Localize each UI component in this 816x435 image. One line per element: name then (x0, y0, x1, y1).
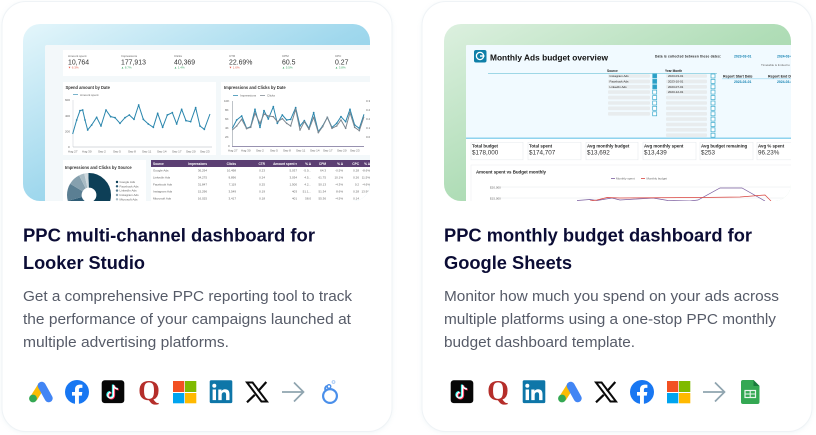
icon: Microsoft (173, 381, 196, 403)
card: Google Sheets budget dashboard (422, 2, 812, 432)
data table by source: Facebook Ads (153, 182, 173, 186)
icon: Microsoft (667, 381, 690, 403)
line chart: impressions and clicks by date: 8K (225, 108, 229, 112)
data table by source: 0.28 (353, 190, 359, 194)
data table by source: 13.9% (361, 190, 370, 194)
KPI boxes: $178,000 (472, 150, 499, 156)
line chart: spend by date: 200 (65, 130, 70, 134)
card 1 description: the performance of your campaigns launched at (23, 312, 351, 328)
KPI boxes: $13,439 (644, 150, 667, 156)
line chart: impressions and clicks by date: Sep 23 (350, 148, 360, 152)
KPI boxes: Avg monthly budget (587, 144, 630, 149)
data table by source: 0.18 (259, 196, 265, 200)
icon: Google Sheets (741, 380, 760, 404)
line chart: amount spent vs budget monthly: Amount spent vs Budget monthly (476, 170, 547, 174)
line chart: impressions and clicks by date: 2K (225, 135, 229, 139)
KPI strip: ▲ 5.5% (282, 66, 293, 70)
line chart: spend by date: Sep 17 (172, 150, 182, 154)
KPI strip: ▲ 1.4% (174, 66, 185, 70)
donut chart: impressions and clicks by source: Microsoft Ads (120, 197, 138, 201)
year-month selector: 2023-07-01 (668, 85, 684, 89)
sheet header: Report End Date (768, 74, 796, 78)
data table by source: 3,034 (289, 176, 297, 180)
line chart: impressions and clicks by date: Sep 20 (337, 148, 347, 152)
icon row: data sources to Google Sheets (451, 376, 760, 407)
icon: LinkedIn (523, 380, 545, 403)
data table by source: -8.6% (362, 168, 370, 172)
data table by source: -4.6% (362, 182, 370, 186)
data table by source: 10.1% (334, 176, 343, 180)
KPI strip: ▼ 1.6% (229, 66, 240, 70)
data table by source: 9,896 (228, 176, 236, 180)
line chart: impressions and clicks by date: 0.0 (366, 135, 371, 139)
source selector: Facebook Ads (610, 79, 629, 83)
data table by source: 401 (292, 196, 297, 200)
data table by source: 0.24 (259, 176, 265, 180)
KPI boxes: Total spent (529, 144, 553, 149)
line chart: impressions and clicks by date: 0.1 (366, 126, 371, 130)
KPI strip: 177,913 (121, 60, 146, 66)
card 2 title: Google Sheets (444, 253, 572, 273)
data table by source: % Δ (337, 162, 344, 166)
data table by source: Source (153, 162, 164, 166)
icon: Looker Studio (323, 381, 337, 403)
icon: X (247, 382, 267, 402)
line chart: spend by date: Aug 30 (82, 150, 92, 154)
card 2 title: PPC monthly budget dashboard for (444, 226, 752, 246)
KPI boxes: $253 (701, 150, 716, 156)
icon: TikTok (451, 380, 473, 403)
card: Looker Studio dashboard (2, 2, 392, 432)
data table by source: 64.3 (320, 168, 326, 172)
source selector: Instagram Ads (610, 74, 629, 78)
data table by source: Instagram Ads (153, 190, 173, 194)
KPI strip: Clicks (174, 54, 182, 58)
data table by source: 58.0 (305, 196, 311, 200)
KPI boxes: 96.23% (758, 150, 780, 156)
line chart: impressions and clicks by date: Sep 17 (323, 148, 333, 152)
line chart: amount spent vs budget monthly (470, 164, 791, 201)
icon: Google Ads (558, 386, 578, 402)
KPI strip (63, 50, 373, 76)
year-month selector (665, 69, 715, 137)
data table by source: 0.25 (259, 182, 265, 186)
line chart: impressions and clicks by date: Sep 11 (296, 148, 306, 152)
icon: Facebook (630, 380, 654, 404)
data table by source: CTR (258, 162, 266, 166)
data table by source: 55.36 (318, 196, 326, 200)
icon: X (596, 382, 616, 402)
data table by source: Amount spent ▾ (273, 162, 297, 166)
card 1 description (23, 289, 353, 351)
line chart: spend by date (63, 82, 216, 155)
line chart: impressions and clicks by date: Sep 2 (256, 148, 264, 152)
card 1 description: Get a comprehensive PPC reporting tool to track (23, 289, 353, 305)
arrow (703, 382, 724, 402)
data table by source: 31,847 (198, 182, 207, 186)
sheet header: Report Start Date (723, 74, 753, 78)
line chart: impressions and clicks by date: Impressions and Clicks by Date (224, 85, 286, 90)
year-month selector: 2023-10-01 (668, 79, 684, 83)
KPI strip: 10,764 (68, 60, 89, 66)
data table by source: 0.19 (259, 190, 265, 194)
icon: Quora: Q (487, 376, 509, 407)
KPI strip: ▲ 3.8% (335, 66, 346, 70)
line chart: impressions and clicks by date: Aug 27 (228, 148, 238, 152)
data table by source (151, 160, 370, 201)
line chart: impressions and clicks by date: Aug 30 (241, 148, 251, 152)
data table by source: 0.2 (355, 182, 359, 186)
year-month selector: 2023-03-01 (668, 74, 684, 78)
donut chart: impressions and clicks by source: Facebook Ads (120, 184, 139, 188)
data table by source: 0.23 (259, 168, 265, 172)
data table by source: 5,037 (289, 168, 297, 172)
icon: Facebook (65, 380, 89, 404)
line chart: spend by date: Sep 5 (113, 150, 121, 154)
line chart: impressions and clicks by date: 0 (228, 144, 230, 148)
sheet header: Monthly Ads budget overview (490, 52, 608, 62)
data table by source: 34,275 (198, 176, 207, 180)
donut chart: impressions and clicks by source (63, 160, 146, 201)
line chart: spend by date: 600 (65, 98, 70, 102)
KPI strip: CPM (282, 54, 289, 58)
data table by source: Clicks (227, 162, 236, 166)
KPI strip: Amount spent (68, 54, 87, 58)
line chart: impressions and clicks by date: Impressions (240, 94, 257, 98)
data table by source: 7,119 (229, 182, 236, 186)
KPI boxes: Avg monthly spent (644, 144, 684, 149)
data table by source: -0.5% (335, 168, 343, 172)
line chart: spend by date: Sep 20 (186, 150, 196, 154)
data table by source: CPM (319, 162, 326, 166)
data table by source: 10,498 (227, 168, 236, 172)
KPI strip: 40,369 (174, 60, 195, 66)
year-month selector: Year Month (665, 69, 682, 73)
line chart: spend by date: Aug 27 (68, 150, 78, 154)
card 1 title: PPC multi-channel dashboard for (23, 226, 315, 246)
line chart: impressions and clicks by date: 4K (225, 126, 229, 130)
line chart: impressions and clicks by date: Sep 8 (283, 148, 291, 152)
icon: Quora: Q (138, 376, 160, 407)
sheet header: 2023-03-01 (734, 54, 751, 58)
line chart: spend by date: Sep 2 (98, 150, 106, 154)
data table by source: 61.75 (318, 176, 326, 180)
KPI strip: 22.69% (229, 60, 252, 66)
sheet header: 2024-03-01 (777, 54, 794, 58)
sheet header: Data is collected between these dates: (655, 54, 721, 58)
sheet header (474, 50, 796, 84)
KPI strip: CPC (335, 54, 342, 58)
KPI boxes: $13,692 (587, 150, 610, 156)
KPI strip: 0.27 (335, 60, 349, 66)
data table by source: -0.6% (362, 196, 370, 200)
line chart: spend by date: Sep 11 (142, 150, 152, 154)
card 1 title: Looker Studio (23, 253, 145, 273)
data table by source: 403 (292, 190, 297, 194)
KPI boxes: Avg budget remaining (701, 144, 748, 149)
line chart: spend by date: Sep 8 (128, 150, 136, 154)
year-month selector: 2023-12-01 (668, 90, 684, 94)
data table by source: 3,417 (228, 196, 236, 200)
data table by source: Google Ads (153, 168, 169, 172)
data table by source: 8.6% (336, 190, 343, 194)
data table by source: 51.34 (318, 190, 326, 194)
data table by source: Microsoft Ads (153, 196, 172, 200)
source selector: LinkedIn Ads (610, 85, 627, 89)
line chart: impressions and clicks by date: Sep 14 (310, 148, 320, 152)
sheet header: 2023-03-01 (734, 80, 751, 84)
data table by source: -4.3% (335, 182, 343, 186)
icon: Google Ads (29, 386, 49, 402)
KPI strip: 60.5 (282, 60, 296, 66)
line chart: amount spent vs budget monthly: Monthly budget (646, 177, 667, 181)
KPI strip: CTR (229, 54, 236, 58)
data table by source: 0.28 (353, 168, 359, 172)
KPI boxes: $174,707 (529, 150, 556, 156)
KPI boxes: Avg % spent (758, 144, 785, 149)
KPI boxes (471, 142, 807, 160)
icon: LinkedIn (210, 380, 232, 403)
data table by source: 11.5% (362, 176, 370, 180)
data table by source: Impressions (188, 162, 207, 166)
card 2 description (444, 289, 779, 351)
line chart: spend by date: Sep 23 (200, 150, 210, 154)
card 1 description: multiple advertising platforms. (23, 335, 229, 351)
line chart: impressions and clicks by date: Clicks (267, 94, 275, 98)
icon row: data sources to Looker Studio (29, 376, 337, 407)
donut chart: impressions and clicks by source: Instagram Ads (120, 193, 139, 197)
data table by source: 3,549 (228, 190, 236, 194)
data table by source: LinkedIn Ads (153, 176, 171, 180)
data table by source: CPC (352, 162, 360, 166)
data table by source: -4.5% (335, 196, 343, 200)
data table by source: 16,025 (198, 196, 207, 200)
KPI boxes: Total budget (472, 144, 499, 149)
line chart: impressions and clicks by date: 10K (224, 99, 229, 103)
line chart: spend by date: 400 (65, 114, 70, 118)
sheet header: Timetable is limited to (761, 63, 790, 67)
data table by source: 4.5... (304, 176, 311, 180)
KPI strip: Impressions (121, 54, 138, 58)
source selector (607, 69, 657, 116)
line chart: impressions and clicks by date: 0.3 (366, 99, 371, 103)
card 2 description: Monitor how much you spend on your ads across (444, 289, 779, 305)
data table by source: 51.1... (303, 190, 311, 194)
data table by source: 15,296 (198, 190, 207, 194)
line chart: impressions and clicks by date: 6K (225, 117, 229, 121)
donut chart: impressions and clicks by source: Google Ads (120, 180, 136, 184)
dashboard preview: Looker Studio (23, 24, 370, 201)
card 2 title (444, 226, 752, 273)
donut chart: impressions and clicks by source: Impressions and Clicks by Source (65, 165, 132, 170)
KPI strip: ▼ 6.3% (68, 66, 79, 70)
data table by source: % Δ (305, 162, 312, 166)
card 1 title (23, 226, 315, 273)
line chart: spend by date: Sep 14 (157, 150, 167, 154)
data table by source: 4.2... (304, 182, 311, 186)
line chart: impressions and clicks by date: 0.2 (366, 117, 371, 121)
line chart: amount spent vs budget monthly: Monthly spent (616, 177, 635, 181)
line chart: spend by date: 0 (68, 145, 70, 149)
line chart: amount spent vs budget monthly: $20,000 (490, 186, 501, 190)
line chart: spend by date: Spend amount by Date (66, 85, 111, 90)
sheet header: 2024-03-01 (777, 80, 794, 84)
source selector: Source (607, 69, 618, 73)
line chart: impressions and clicks by date: 0.2 (366, 108, 371, 112)
data table by source: 1,500 (289, 182, 297, 186)
data table by source: 0.14 (353, 196, 359, 200)
data table by source: % Δ (364, 162, 371, 166)
data table by source: 36,294 (198, 168, 207, 172)
line chart: amount spent vs budget monthly: $15,000 (490, 196, 501, 200)
data table by source: -5.0... (303, 168, 311, 172)
arrow (282, 382, 304, 402)
line chart: impressions and clicks by date (221, 82, 381, 155)
KPI strip: ▲ 8.7% (121, 66, 132, 70)
card 2 description: multiple platforms using a one-stop PPC monthly (444, 312, 777, 328)
card 2 description: budget dashboard template. (444, 335, 635, 351)
icon: TikTok (102, 380, 124, 403)
data table by source: 0.26 (353, 176, 359, 180)
line chart: impressions and clicks by date: Sep 5 (270, 148, 278, 152)
dashboard preview: Google Sheets (444, 24, 807, 205)
donut chart: impressions and clicks by source: LinkedIn Ads (120, 189, 137, 193)
line chart: spend by date: Amount spent (80, 93, 99, 97)
data table by source: 50.13 (318, 182, 326, 186)
